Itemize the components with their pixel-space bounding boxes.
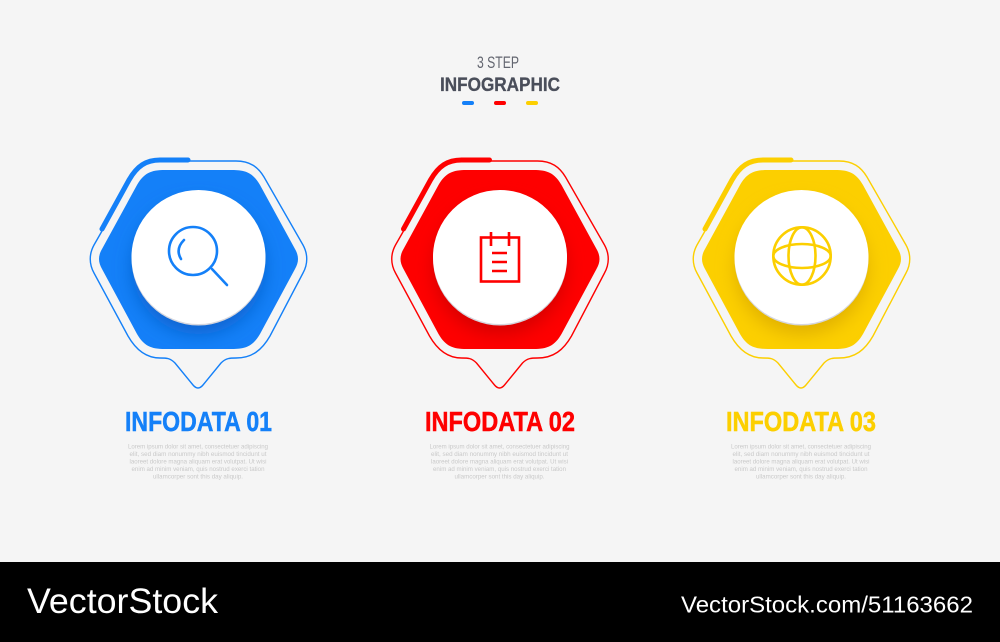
white circle <box>433 190 567 324</box>
legend dashes <box>462 101 538 105</box>
description: laoreet dolore magna aliquam erat volutpat. Ut wisi <box>431 458 568 466</box>
white circle <box>734 190 868 324</box>
panel: infodata 03 <box>693 160 910 480</box>
circle shadow <box>132 202 264 334</box>
description: ullamcorper sont this day aliquip. <box>454 474 545 480</box>
thick accent stroke <box>102 160 188 229</box>
title: 3 step: 3 STEP <box>477 54 519 72</box>
icon: magnifier <box>169 227 227 285</box>
description: enim ad minim veniam, quis nostrud exerci tation <box>132 466 265 473</box>
heading: INFODATA 03 <box>726 406 876 437</box>
footer logo text: VectorStock <box>27 582 219 621</box>
hexagon <box>400 170 600 349</box>
description: Lorem ipsum dolor sit amet, consectetuer adipiscing <box>430 444 570 450</box>
pin outline <box>90 161 307 388</box>
circle shadow <box>730 240 872 339</box>
description: ullamcorper sont this day aliquip. <box>756 474 846 480</box>
footer url text: VectorStock.com/51163662 <box>681 592 973 618</box>
description: elit, sed diam nonummy nibh euismod tincidunt ut <box>431 451 568 458</box>
icon: globe <box>773 227 831 285</box>
white circle <box>132 190 266 324</box>
circle rim <box>734 192 868 326</box>
description: elit, sed diam nonummy nibh euismod tincidunt ut <box>732 451 870 458</box>
title: infographic: INFOGRAPHIC <box>440 74 560 96</box>
footer bar <box>0 562 1000 642</box>
circle rim <box>433 192 567 326</box>
panel: infodata 01 <box>90 160 307 480</box>
description <box>430 444 570 480</box>
description: Lorem ipsum dolor sit amet, consectetuer adipiscing <box>731 444 871 450</box>
icon: notepad <box>481 232 519 282</box>
pin outline <box>693 161 910 388</box>
hexagon <box>702 170 901 349</box>
heading: INFODATA 01 <box>125 406 272 437</box>
description <box>128 444 268 480</box>
thick accent stroke <box>404 160 490 229</box>
description: enim ad minim veniam, quis nostrud exerci tation <box>433 466 566 473</box>
title block <box>440 54 560 105</box>
description <box>731 444 871 480</box>
thick accent stroke <box>705 160 791 229</box>
description: laoreet dolore magna aliquam erat volutpat. Ut wisi <box>130 458 266 466</box>
description: enim ad minim veniam, quis nostrud exerci tation <box>734 466 868 473</box>
description: elit, sed diam nonummy nibh euismod tincidunt ut <box>130 451 267 458</box>
circle shadow <box>434 202 566 334</box>
description: Lorem ipsum dolor sit amet, consectetuer adipiscing <box>128 444 268 450</box>
description: ullamcorper sont this day aliquip. <box>153 474 243 480</box>
hexagon <box>99 170 298 349</box>
pin outline <box>392 161 608 388</box>
circle rim <box>132 192 266 326</box>
heading: INFODATA 02 <box>425 406 575 437</box>
description: laoreet dolore magna aliquam erat volutpat. Ut wisi <box>732 458 870 466</box>
panel: infodata 02 <box>392 160 608 480</box>
